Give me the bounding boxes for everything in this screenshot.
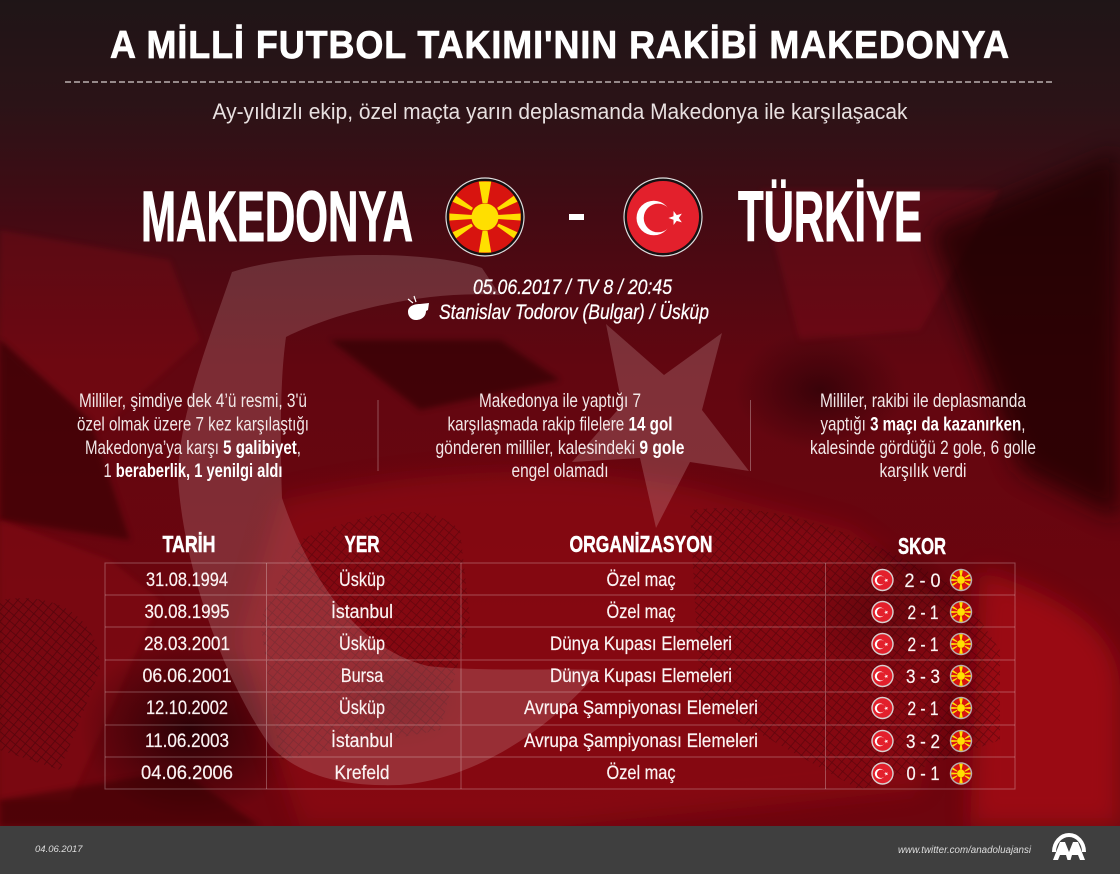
row 5 bbox=[146, 697, 972, 720]
table headers: TARİH bbox=[162, 531, 216, 557]
twitter url: www.twitter.com/anadoluajansi bbox=[898, 845, 1032, 856]
publication date: 04.06.2017 bbox=[35, 844, 83, 855]
title: A MİLLİ FUTBOL TAKIMI'NIN RAKİBİ MAKEDONYA bbox=[110, 24, 1010, 67]
row 1: 2 - 0 bbox=[904, 571, 940, 592]
text block: goals bbox=[436, 390, 685, 482]
row 4: 06.06.2001 bbox=[142, 666, 232, 687]
row 1 bbox=[146, 569, 972, 592]
row 5: 2 - 1 bbox=[908, 699, 938, 720]
row 2: 2 - 1 bbox=[908, 603, 938, 624]
text block: goals: engel olamadı bbox=[512, 460, 608, 482]
table headers: ORGANİZASYON bbox=[570, 531, 712, 557]
row 3: Dünya Kupası Elemeleri bbox=[550, 634, 732, 655]
match info bbox=[408, 276, 709, 324]
text block: record: Milliler, şimdiye dek 4’ü resmi, 3'ü bbox=[79, 390, 307, 412]
results table bbox=[105, 531, 1015, 789]
row 7 bbox=[141, 762, 972, 785]
row 5: 12.10.2002 bbox=[146, 698, 228, 719]
text block: away record: yaptığı 3 maçı da kazanırken, bbox=[820, 414, 1026, 436]
text block: goals: karşılaşmada rakip filelere 14 gol bbox=[448, 414, 672, 436]
row 4: Dünya Kupası Elemeleri bbox=[550, 666, 732, 687]
row 7: 04.06.2006 bbox=[141, 763, 233, 784]
footer bbox=[0, 826, 1120, 874]
team name: Türkiye: TÜRKİYE bbox=[738, 178, 922, 257]
subtitle: Ay-yıldızlı ekip, özel maçta yarın deplasmanda Makedonya ile karşılaşacak bbox=[212, 99, 908, 124]
row 6: Avrupa Şampiyonası Elemeleri bbox=[524, 731, 758, 752]
row 1: Özel maç bbox=[606, 570, 676, 591]
text block: record: özel olmak üzere 7 kez karşılaştığı bbox=[77, 414, 309, 436]
team name: Makedonya: MAKEDONYA bbox=[141, 178, 413, 257]
match heading bbox=[141, 178, 922, 257]
row 7: Krefeld bbox=[334, 763, 390, 784]
row 4 bbox=[142, 665, 972, 688]
icon: Anadolu Agency logo bbox=[1053, 835, 1085, 860]
referee and venue: Stanislav Todorov (Bulgar) / Üsküp bbox=[439, 301, 709, 324]
row 6: İstanbul bbox=[331, 731, 393, 752]
table headers: SKOR bbox=[898, 533, 946, 559]
row 6 bbox=[145, 730, 972, 753]
row 1: 31.08.1994 bbox=[146, 570, 228, 591]
flag crescent watermark bbox=[178, 255, 600, 785]
text block: goals: gönderen milliler, kalesindeki 9 gole bbox=[436, 437, 685, 459]
flag star watermark bbox=[572, 324, 749, 528]
dash bbox=[569, 214, 584, 220]
icon: Turkey flag bbox=[624, 178, 702, 256]
date and channel: 05.06.2017 / TV 8 / 20:45 bbox=[473, 276, 672, 299]
row 7: Özel maç bbox=[606, 763, 676, 784]
text block: record: Makedonya’ya karşı 5 galibiyet, bbox=[85, 437, 301, 459]
row 1: Üsküp bbox=[339, 570, 385, 591]
row 6: 3 - 2 bbox=[906, 732, 940, 753]
icon: whistle bbox=[408, 296, 429, 320]
text block: away record: Milliler, rakibi ile deplasmanda bbox=[820, 390, 1026, 412]
row 2: İstanbul bbox=[331, 602, 393, 623]
row 5: Avrupa Şampiyonası Elemeleri bbox=[524, 698, 758, 719]
row 3 bbox=[144, 633, 972, 656]
row 3: 28.03.2001 bbox=[144, 634, 230, 655]
table grid bbox=[105, 563, 1015, 789]
text block: away record: kalesinde gördüğü 2 gole, 6 golle bbox=[810, 437, 1036, 459]
table headers: YER bbox=[344, 531, 380, 557]
text block: record: 1 beraberlik, 1 yenilgi aldı bbox=[104, 460, 282, 482]
icon: Macedonia flag bbox=[446, 178, 524, 256]
row 6: 11.06.2003 bbox=[145, 731, 229, 752]
row 2: Özel maç bbox=[606, 602, 676, 623]
text block: away record: karşılık verdi bbox=[880, 460, 966, 482]
row 2 bbox=[144, 601, 972, 624]
row 3: Üsküp bbox=[339, 634, 385, 655]
row 7: 0 - 1 bbox=[906, 764, 940, 785]
row 2: 30.08.1995 bbox=[144, 602, 230, 623]
row 4: 3 - 3 bbox=[906, 667, 940, 688]
text block: goals: Makedonya ile yaptığı 7 bbox=[479, 390, 641, 412]
text block: record bbox=[77, 390, 309, 482]
row 4: Bursa bbox=[341, 666, 384, 687]
table headers bbox=[162, 531, 946, 559]
row 5: Üsküp bbox=[339, 698, 385, 719]
row 3: 2 - 1 bbox=[908, 635, 938, 656]
text block: away record bbox=[810, 390, 1036, 482]
